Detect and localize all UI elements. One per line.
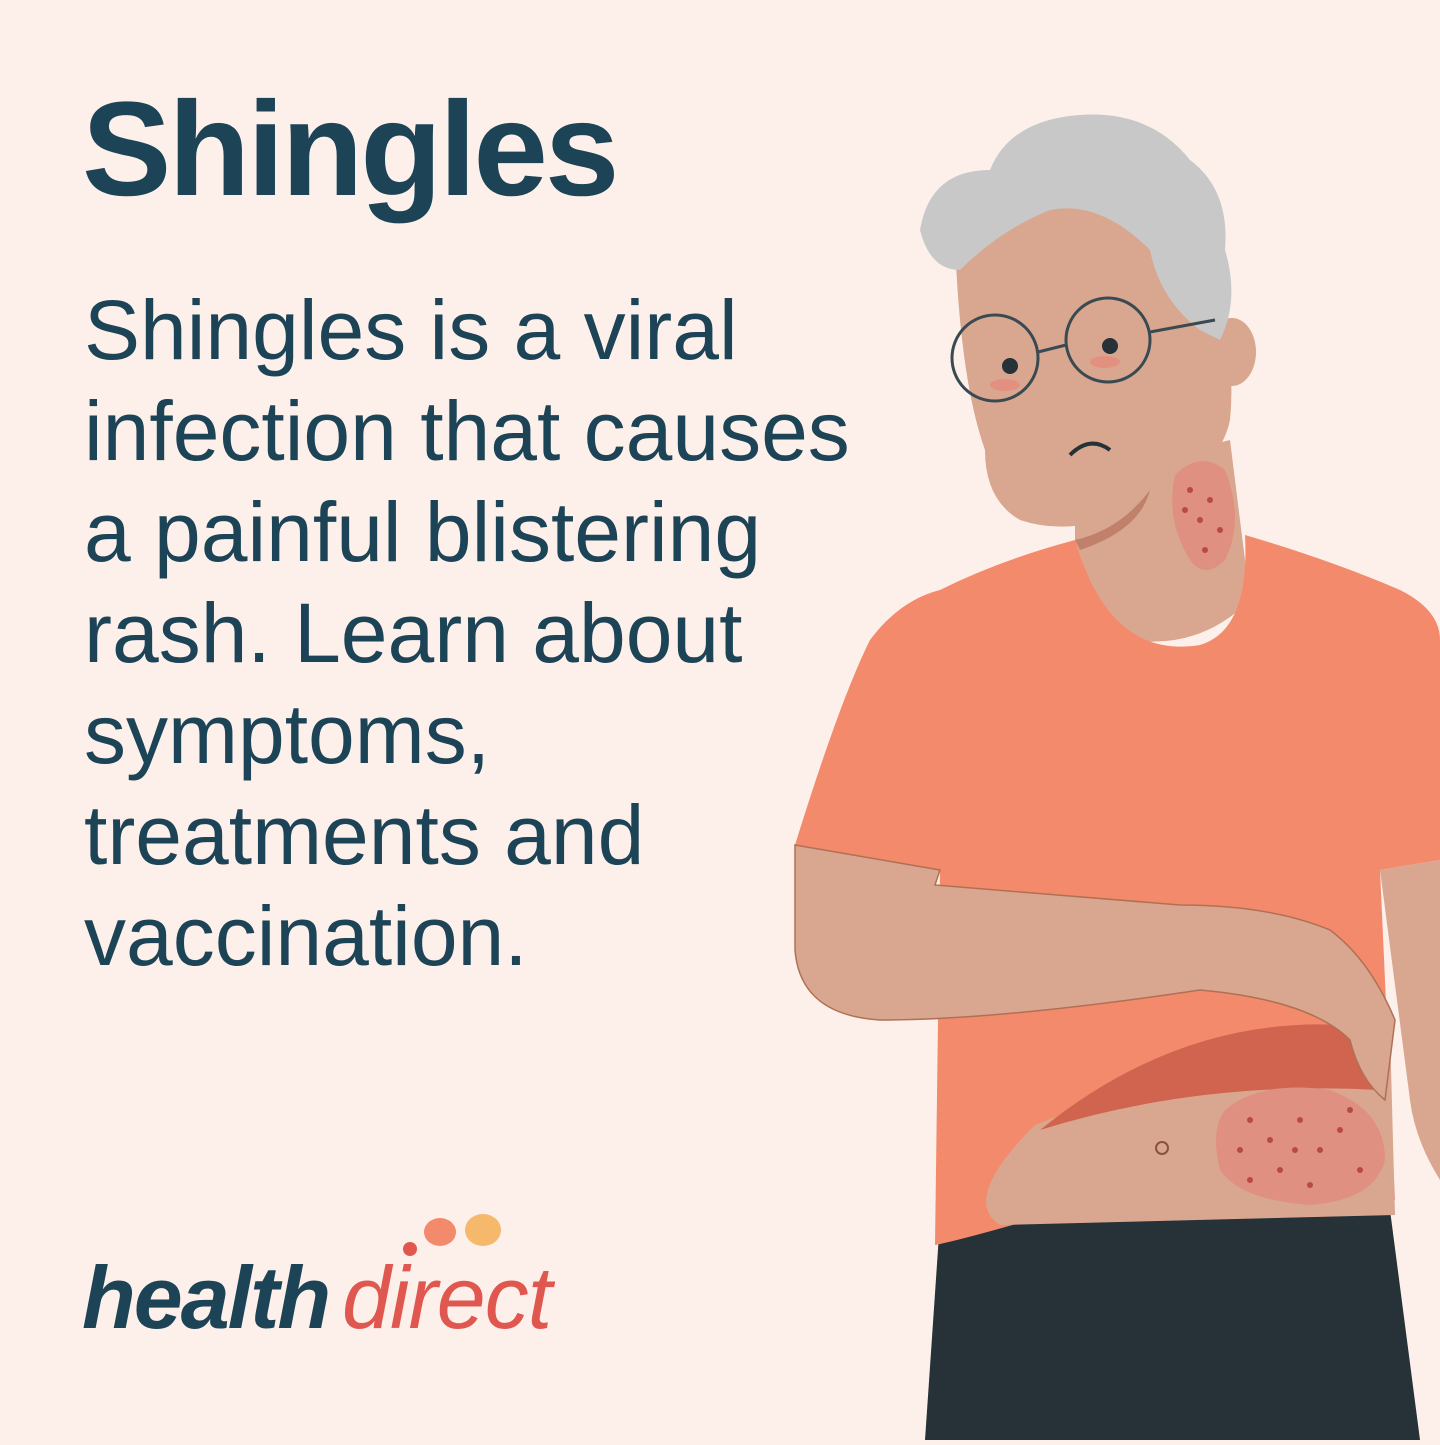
body text bbox=[84, 283, 850, 983]
logo: healthdirect bbox=[82, 1214, 556, 1340]
body text: infection that causes bbox=[84, 384, 850, 478]
body text: a painful blistering bbox=[84, 485, 761, 579]
illustration: man with shingles rash bbox=[794, 114, 1440, 1440]
body text: rash. Learn about bbox=[84, 586, 742, 680]
body text: Shingles is a viral bbox=[84, 283, 738, 377]
title: Shingles bbox=[82, 75, 616, 224]
body text: treatments and bbox=[84, 788, 644, 882]
body text: symptoms, bbox=[84, 687, 490, 781]
body text: vaccination. bbox=[84, 889, 528, 983]
